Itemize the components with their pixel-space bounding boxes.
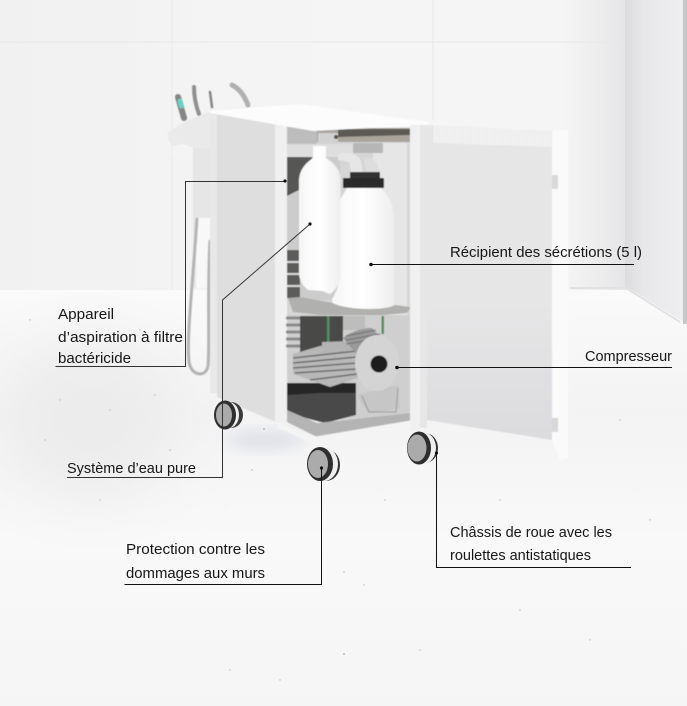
callout: système d'eau pure: Système d’eau pure <box>67 461 196 477</box>
callout: appareil d'aspiration: Appareil <box>58 307 114 323</box>
spring coil <box>286 318 300 346</box>
callout: châssis de roue: Châssis de roue avec les <box>450 525 612 541</box>
top surface <box>210 104 428 131</box>
wheel: front centre <box>307 447 340 481</box>
instrument handpieces <box>178 85 248 118</box>
wheel: front right <box>407 432 438 464</box>
secretions container <box>332 172 394 310</box>
interior <box>287 128 412 420</box>
top mechanism <box>287 127 317 146</box>
left side panel <box>217 113 276 422</box>
callout: protection contre les dommages <box>124 466 323 584</box>
lower box and tray <box>287 383 356 400</box>
compressor <box>293 328 399 391</box>
pure water bottle <box>299 146 341 294</box>
pipes <box>338 153 363 172</box>
callout: protection contre les dommages: Protection contre les <box>126 542 265 558</box>
callout: récipient des sécrétions: Récipient des sécrétions (5 l) <box>450 245 642 261</box>
product: dental cart <box>168 85 568 460</box>
wheel: rear left <box>214 400 243 430</box>
callout: récipient des sécrétions <box>369 245 642 266</box>
callout: compresseur <box>395 349 672 369</box>
callout: appareil d'aspiration <box>56 179 287 367</box>
lower rear <box>287 315 411 418</box>
callout: protection contre les dommages: dommages aux murs <box>126 566 265 582</box>
shelf <box>288 297 411 318</box>
callout: compresseur: Compresseur <box>585 349 672 365</box>
callout: châssis de roue <box>435 451 631 568</box>
door frame <box>410 125 420 430</box>
callout: appareil d'aspiration: bactéricide <box>58 351 131 367</box>
callout: appareil d'aspiration: d’aspiration à filtre <box>58 330 183 346</box>
callout: châssis de roue: roulettes antistatiques <box>450 548 591 564</box>
left bracket <box>193 146 218 288</box>
interior upper rear <box>287 157 340 300</box>
hoses <box>188 218 210 374</box>
caster wheels <box>214 400 438 481</box>
callout: système d'eau pure <box>67 222 312 478</box>
open door <box>427 125 552 440</box>
